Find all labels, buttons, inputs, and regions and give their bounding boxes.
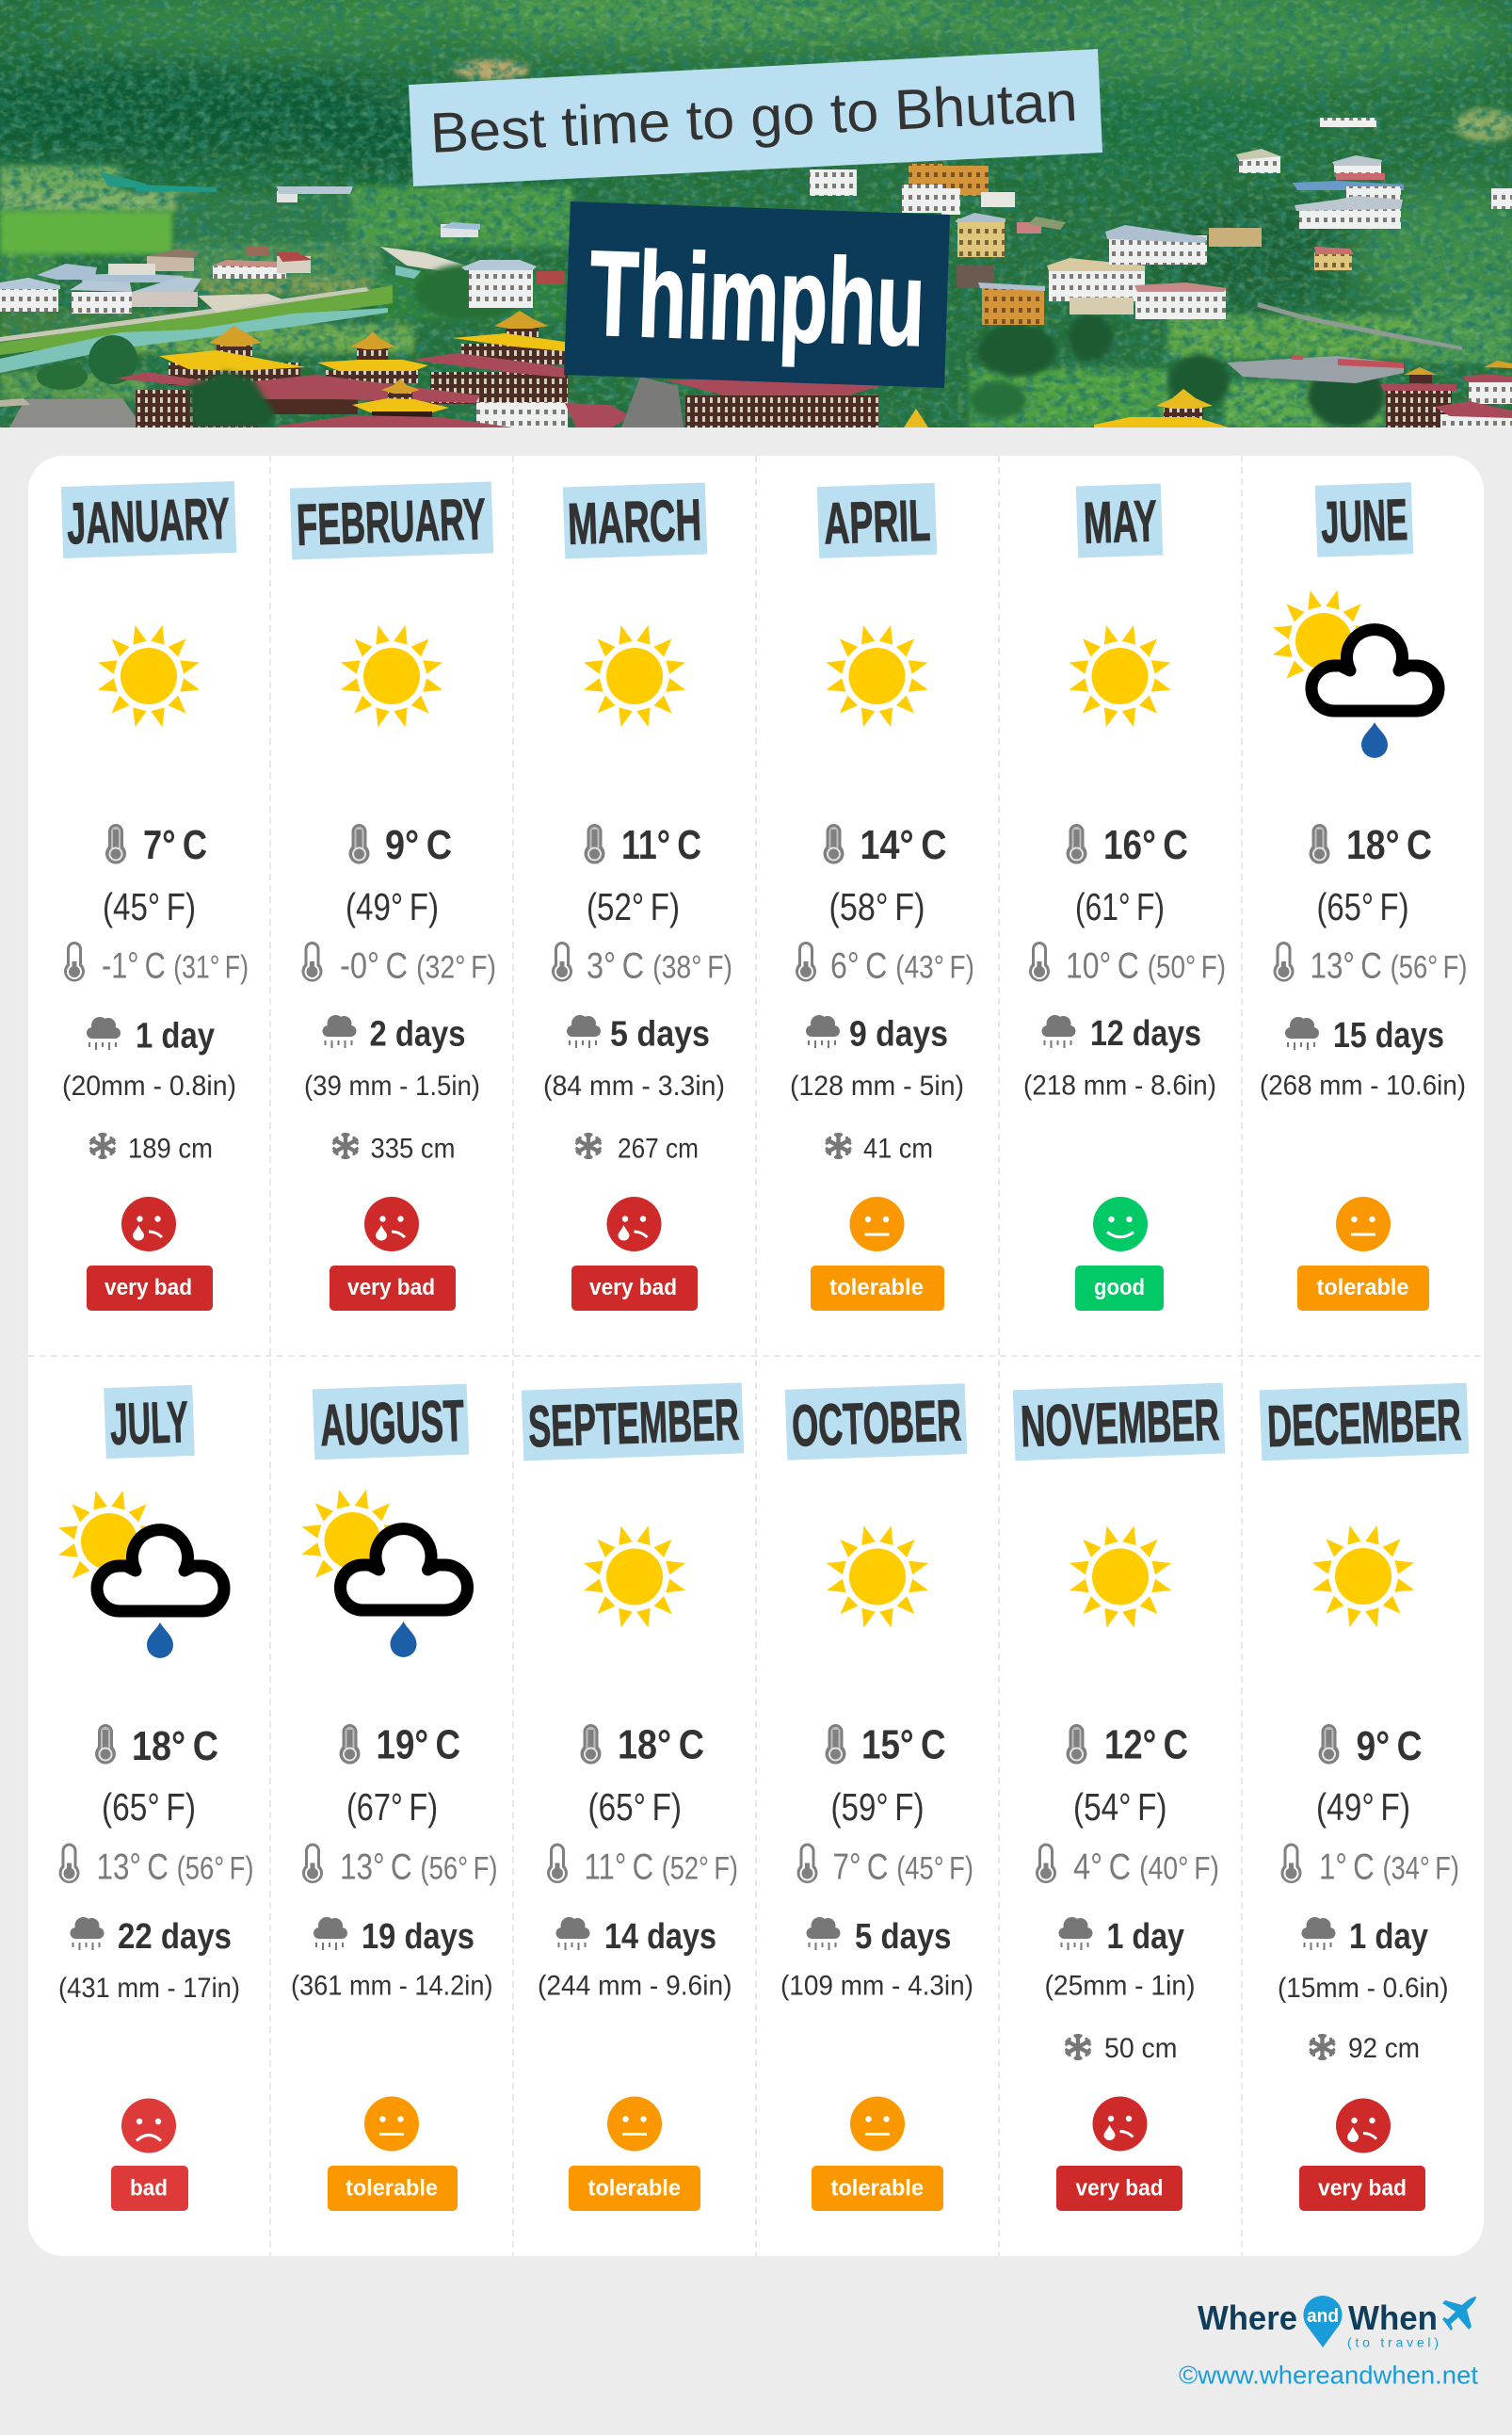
high temperature: (67° F) <box>346 1785 438 1829</box>
month label: September: SEPTEMBER <box>527 1388 740 1459</box>
snowfall: 189 cm <box>128 1134 213 1164</box>
low temperature <box>1273 942 1467 987</box>
high temperature <box>339 1721 460 1829</box>
title banner: Thimphu: Thimphu <box>587 226 927 372</box>
high temperature: 18° C <box>132 1723 218 1769</box>
valley details <box>0 171 1462 427</box>
low temperature: 3° C (38° F) <box>587 945 732 987</box>
rainfall: 19 days <box>362 1917 475 1957</box>
month label: June: JUNE <box>1320 488 1408 556</box>
low temperature <box>302 1844 497 1887</box>
footer website: ©www.whereandwhen.net <box>1179 2362 1478 2390</box>
hero photo: Thimphu valley <box>0 0 1512 427</box>
rainfall: (109 mm - 4.3in) <box>780 1970 973 2002</box>
month label: November <box>1013 1383 1225 1460</box>
low temperature: 4° C (40° F) <box>1073 1847 1219 1887</box>
high temperature: (59° F) <box>830 1785 925 1829</box>
panel: monthly card <box>28 456 1484 2256</box>
rating: good <box>1075 1197 1164 1311</box>
low temperature <box>1029 942 1226 987</box>
rainfall: (218 mm - 8.6in) <box>1023 1070 1216 1102</box>
high temperature: 19° C <box>377 1721 460 1768</box>
rating: tolerable: tolerable <box>830 2175 924 2201</box>
rainfall: (431 mm - 17in) <box>58 1973 240 2004</box>
right buildings <box>810 118 1512 383</box>
rainfall: (361 mm - 14.2in) <box>291 1970 493 2002</box>
snowfall: 92 cm <box>1348 2033 1420 2064</box>
icon: sun behind rain cloud <box>1271 589 1439 758</box>
high temperature <box>1066 1721 1188 1829</box>
month label: June <box>1315 482 1413 557</box>
rainfall: 1 day <box>1349 1917 1428 1957</box>
month label: October <box>785 1383 967 1460</box>
high temperature <box>580 1721 704 1829</box>
rainfall <box>780 1917 973 2002</box>
rainfall: (244 mm - 9.6in) <box>538 1970 732 2002</box>
icon: sun <box>1068 1524 1173 1630</box>
title banner: Thimphu <box>564 202 950 388</box>
rating: bad: bad <box>130 2175 168 2201</box>
low temperature <box>301 942 496 987</box>
month label: October: OCTOBER <box>791 1388 962 1459</box>
rainfall: 9 days <box>849 1015 948 1055</box>
low temperature <box>1036 1844 1219 1887</box>
rating: tolerable <box>328 2096 458 2211</box>
icon: sun <box>582 1524 687 1630</box>
rainfall: 5 days <box>610 1015 710 1055</box>
title banner: Best time to go to Bhutan <box>409 49 1102 186</box>
low temperature: 13° C (56° F) <box>340 1847 497 1887</box>
panel: March <box>543 483 732 1311</box>
icon: plane <box>1442 2297 1476 2330</box>
rainfall: 15 days <box>1333 1016 1444 1056</box>
rainfall <box>1260 1016 1466 1102</box>
rainfall: 1 day <box>1107 1917 1184 1957</box>
month label: August <box>313 1384 469 1459</box>
title banner: Best time to go to Bhutan: Best time to go to Bhutan <box>428 70 1079 165</box>
rainfall: (20mm - 0.8in) <box>62 1071 236 1102</box>
panel: June <box>1260 482 1467 1311</box>
high temperature <box>584 822 701 928</box>
footer logo: Where and When <box>1198 2296 1476 2350</box>
high temperature <box>103 822 207 928</box>
rating: very bad <box>1056 2096 1182 2211</box>
rainfall <box>58 1917 240 2004</box>
low temperature <box>796 942 974 987</box>
month label: April: APRIL <box>823 489 931 556</box>
high temperature: (65° F) <box>1316 885 1408 928</box>
high temperature <box>1066 822 1188 928</box>
panel: September <box>522 1382 744 2211</box>
month label: February <box>290 481 493 560</box>
month label: February: FEBRUARY <box>296 487 487 558</box>
snowfall <box>90 1133 213 1164</box>
panel: April <box>790 483 974 1311</box>
high temperature: 14° C <box>861 822 947 868</box>
rating: good: good <box>1094 1275 1145 1300</box>
low temperature <box>58 1844 254 1887</box>
month label: May <box>1076 484 1163 557</box>
rating: very bad <box>1299 2098 1425 2211</box>
low temperature <box>64 942 249 987</box>
rainfall: (15mm - 0.6in) <box>1278 1973 1448 2004</box>
high temperature: 18° C <box>618 1721 704 1768</box>
icon: sun <box>825 1524 930 1630</box>
low temperature: 11° C (52° F) <box>584 1847 738 1887</box>
rating: tolerable <box>811 1197 944 1311</box>
high temperature: 9° C <box>385 822 452 868</box>
high temperature: 11° C <box>621 822 701 868</box>
high temperature <box>346 822 452 928</box>
snowfall: 41 cm <box>863 1134 933 1164</box>
rating: tolerable <box>812 2096 943 2211</box>
rating: very bad: very bad <box>1318 2175 1407 2201</box>
low temperature: -0° C (32° F) <box>340 945 496 987</box>
rating: very bad <box>87 1197 213 1311</box>
rainfall: (39 mm - 1.5in) <box>304 1071 480 1102</box>
snowfall <box>826 1133 933 1164</box>
rating: tolerable: tolerable <box>587 2175 681 2201</box>
rainfall: (268 mm - 10.6in) <box>1260 1070 1466 1102</box>
rating: tolerable: tolerable <box>346 2175 438 2201</box>
high temperature <box>1316 1723 1422 1829</box>
snowfall <box>333 1133 456 1164</box>
high temperature: 18° C <box>1346 822 1432 868</box>
icon: sun <box>339 623 444 729</box>
high temperature: 15° C <box>861 1721 945 1768</box>
rainfall <box>543 1015 725 1102</box>
rainfall: 12 days <box>1090 1014 1201 1054</box>
high temperature: (45° F) <box>103 885 196 928</box>
snowfall <box>1310 2033 1420 2064</box>
rating: tolerable <box>1297 1197 1429 1311</box>
month label: July: JULY <box>109 1390 189 1458</box>
rainfall <box>790 1015 964 1102</box>
high temperature: (49° F) <box>1316 1785 1410 1829</box>
high temperature: (52° F) <box>587 885 680 928</box>
rating: very bad: very bad <box>1075 2175 1164 2201</box>
month label: April <box>817 483 937 558</box>
low temperature: 1° C (34° F) <box>1319 1847 1459 1887</box>
panel: May <box>1023 484 1226 1311</box>
month label: March: MARCH <box>567 488 702 557</box>
footer logo: Where and When: When <box>1348 2298 1438 2337</box>
panel: December <box>1260 1383 1469 2211</box>
month label: January: JANUARY <box>66 487 231 556</box>
icon: map pin with and: and <box>1307 2306 1339 2327</box>
rating: tolerable: tolerable <box>1316 1275 1408 1300</box>
rating: very bad: very bad <box>589 1275 677 1300</box>
icon: sun behind rain cloud <box>56 1489 224 1658</box>
icon: sun <box>1311 1524 1416 1629</box>
rating: tolerable <box>569 2096 700 2211</box>
low temperature <box>547 1844 738 1887</box>
panel: January <box>61 481 249 1311</box>
icon: map pin with and <box>1303 2296 1342 2347</box>
low temperature <box>552 942 732 987</box>
high temperature: 16° C <box>1103 822 1188 868</box>
low temperature <box>796 1844 973 1887</box>
high temperature: 9° C <box>1356 1723 1422 1769</box>
snowfall: 267 cm <box>618 1134 699 1164</box>
left buildings <box>0 186 565 314</box>
snowfall: 335 cm <box>371 1134 456 1164</box>
rating: bad <box>111 2098 188 2211</box>
panel: October <box>780 1383 973 2211</box>
rainfall <box>291 1917 493 2002</box>
low temperature: 13° C (56° F) <box>96 1847 254 1887</box>
snowfall <box>1066 2033 1177 2064</box>
snowfall <box>576 1133 699 1164</box>
high temperature: 12° C <box>1104 1721 1188 1768</box>
rainfall <box>1023 1014 1216 1102</box>
month label: November: NOVEMBER <box>1020 1388 1220 1459</box>
panel: November <box>1013 1383 1225 2211</box>
panel: July <box>56 1385 254 2211</box>
rainfall: 1 day <box>136 1017 215 1056</box>
high temperature: (58° F) <box>828 885 925 928</box>
rainfall <box>304 1015 480 1102</box>
high temperature <box>825 1721 945 1829</box>
rainfall: (84 mm - 3.3in) <box>543 1071 725 1102</box>
dzong buildings <box>0 311 1512 428</box>
high temperature: (61° F) <box>1075 885 1165 928</box>
icon: sun <box>824 623 930 729</box>
month label: August: AUGUST <box>319 1389 465 1459</box>
low temperature: 10° C (50° F) <box>1066 945 1226 987</box>
rainfall: 22 days <box>118 1917 232 1957</box>
icon: sun <box>1067 623 1173 729</box>
rainfall: (128 mm - 5in) <box>790 1071 964 1102</box>
rating: very bad: very bad <box>347 1275 435 1300</box>
rainfall: 2 days <box>369 1015 465 1055</box>
rainfall: 14 days <box>604 1917 716 1957</box>
month label: July <box>104 1385 195 1459</box>
snowfall: 50 cm <box>1104 2033 1177 2064</box>
rating: very bad <box>571 1197 698 1311</box>
high temperature <box>823 822 947 928</box>
month label: May: MAY <box>1083 489 1158 556</box>
low temperature: -1° C (31° F) <box>102 945 249 987</box>
low temperature <box>1280 1844 1459 1887</box>
low temperature: 7° C (45° F) <box>832 1847 973 1887</box>
rainfall <box>1045 1917 1196 2002</box>
panel: February <box>290 481 496 1311</box>
month label: March <box>563 483 707 558</box>
high temperature: (54° F) <box>1073 1785 1167 1829</box>
rainfall: (25mm - 1in) <box>1045 1970 1196 2002</box>
footer logo: Where and When: (to travel) <box>1347 2335 1439 2350</box>
footer logo: Where and When: Where <box>1198 2298 1297 2337</box>
rainfall: 5 days <box>855 1917 951 1957</box>
month label: September <box>522 1382 744 1461</box>
rainfall <box>1278 1917 1448 2004</box>
low temperature: 13° C (56° F) <box>1311 945 1467 987</box>
high temperature: 7° C <box>143 822 207 868</box>
high temperature: (65° F) <box>102 1785 196 1829</box>
high temperature: (65° F) <box>587 1785 682 1829</box>
icon: sun behind rain cloud <box>299 1488 467 1657</box>
high temperature <box>1309 822 1432 928</box>
rating: tolerable: tolerable <box>829 1275 924 1300</box>
rainfall <box>62 1017 236 1102</box>
icon: sun <box>582 623 687 729</box>
rating: very bad: very bad <box>105 1275 192 1300</box>
high temperature: (49° F) <box>346 885 439 928</box>
high temperature <box>95 1723 218 1829</box>
rating: very bad <box>330 1197 456 1311</box>
icon: sun <box>96 623 201 729</box>
rainfall <box>538 1917 732 2002</box>
low temperature: 6° C (43° F) <box>830 945 974 987</box>
month label: January <box>61 481 236 558</box>
panel: August <box>291 1384 497 2211</box>
